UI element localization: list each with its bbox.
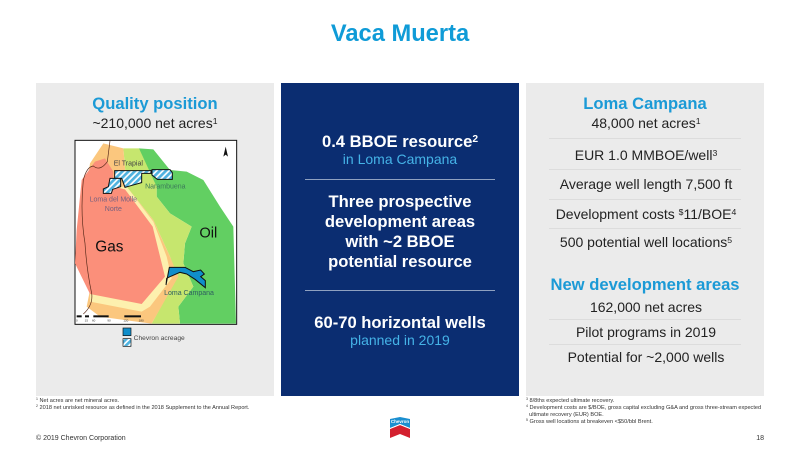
- label: Narambuena: Narambuena: [145, 183, 186, 190]
- block: horizontal wells: 60-70 horizontal wells: [314, 313, 486, 332]
- icon: Loma Campana acreage: [166, 267, 205, 288]
- footnotes: right: 3 8/8ths expected ultimate recovery.: [526, 397, 614, 404]
- block: resource: 0.4 BBOE resource2: [322, 132, 478, 151]
- footnotes: right: 4 Development costs are $/BOE, gross capital excluding G&A and gross three-stream expected: [526, 404, 761, 411]
- map: acreage: 60: [92, 319, 96, 323]
- map: acreage: 180: [139, 319, 144, 323]
- panel: center highlights: [281, 83, 519, 396]
- block: prospective development areas: development areas: [325, 212, 475, 231]
- heading: Loma Campana: Loma Campana: [583, 94, 707, 113]
- footnotes: right: ultimate recovery (EUR) BOE.: [529, 412, 604, 418]
- text: new net acres: 162,000 net acres: [590, 299, 702, 315]
- north arrow: [223, 147, 228, 157]
- logo: Chevron: [390, 417, 410, 438]
- text: development costs: Development costs $11/BOE4: [556, 206, 736, 222]
- text: well locations: 500 potential well locations5: [560, 234, 732, 250]
- map: acreage: 15: [85, 319, 88, 323]
- legend: Chevron acreage: Chevron acreage: [134, 335, 185, 342]
- footnotes: left: [36, 397, 249, 411]
- text: EUR: EUR 1.0 MMBOE/well3: [575, 147, 717, 163]
- text: well length: Average well length 7,500 ft: [560, 176, 732, 192]
- panel: right details: [526, 83, 764, 396]
- block: prospective development areas: [325, 192, 475, 271]
- text: in Loma Campana: in Loma Campana: [343, 151, 457, 167]
- title: Vaca Muerta: [331, 21, 469, 47]
- block: prospective development areas: potential resource: [328, 252, 472, 271]
- map: acreage: 0: [76, 319, 78, 323]
- icon: Chevron hatched acreage: [103, 170, 172, 193]
- footnotes: left: 1 Net acres are net mineral acres.: [36, 397, 119, 404]
- map: acreage: [74, 140, 238, 347]
- block: prospective development areas: Three prospective: [329, 192, 471, 211]
- label: Loma del Molle Norte: Loma del Molle: [90, 197, 137, 204]
- text: potential wells: Potential for ~2,000 wells: [568, 349, 724, 365]
- footnotes: right: 5 Gross well locations at breakeven <$50/bbl Brent.: [526, 418, 653, 425]
- footnotes: right: [526, 397, 761, 425]
- map: acreage: 120: [123, 319, 129, 323]
- text: pilot programs: Pilot programs in 2019: [576, 324, 716, 340]
- text: net acres: ~210,000 net acres1: [92, 115, 218, 131]
- label: Loma del Molle Norte: Norte: [105, 206, 122, 213]
- logo: Chevron: Chevron: [391, 419, 409, 424]
- footnotes: left: 2 2018 net unrisked resource as defined in the 2018 Supplement to the Annual Report.: [36, 404, 249, 411]
- heading: new development areas: New development areas: [550, 275, 740, 294]
- map: acreage: 90: [107, 319, 111, 323]
- label: oil: Oil: [199, 225, 217, 241]
- legend: Chevron acreage: [123, 328, 185, 346]
- copyright: © 2019 Chevron Corporation: [36, 435, 126, 442]
- text: net acres: 48,000 net acres1: [591, 115, 701, 131]
- page number: 18: [756, 435, 764, 442]
- block: prospective development areas: with ~2 BBOE: [345, 232, 455, 251]
- scale bar: [77, 315, 141, 317]
- panel: quality position: [36, 83, 274, 396]
- label: gas: Gas: [95, 238, 124, 255]
- text: planned in 2019: planned in 2019: [350, 332, 450, 348]
- heading: quality position: Quality position: [92, 94, 218, 113]
- label: Loma Campana: Loma Campana: [164, 290, 214, 297]
- label: El Trapial: El Trapial: [114, 161, 143, 168]
